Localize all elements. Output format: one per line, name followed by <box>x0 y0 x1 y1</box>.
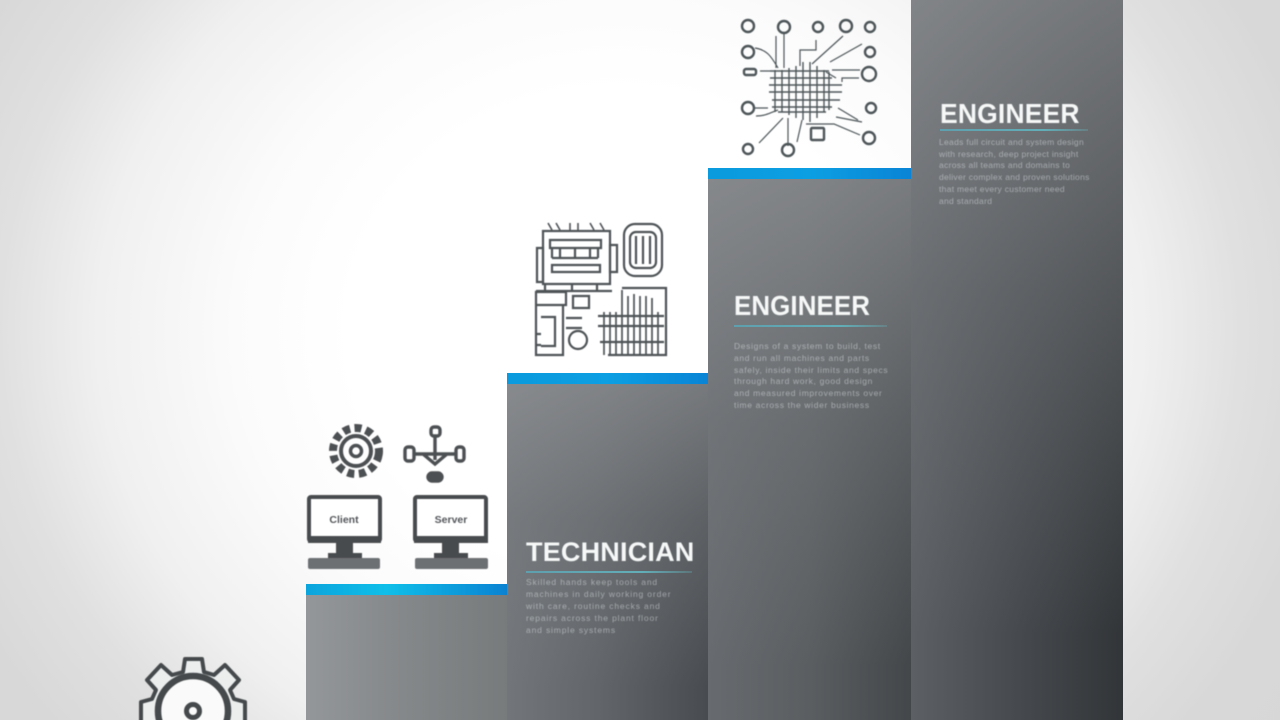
rack array <box>598 288 666 355</box>
icon: valve connector <box>402 424 466 484</box>
body text: and standard <box>939 196 992 206</box>
icon: circuit chip <box>740 18 878 158</box>
body text: Skilled hands keep tools and <box>526 577 658 587</box>
body text <box>938 137 1090 206</box>
body text: repairs across the plant floor <box>526 613 659 623</box>
heading rule <box>526 571 692 572</box>
screen label: Server <box>435 514 467 526</box>
body text: time across the wider business <box>734 400 870 410</box>
body text: with research, deep project insight <box>939 149 1078 159</box>
body text: Designs of a system to build, test <box>734 341 881 351</box>
body text: with care, routine checks and <box>526 601 661 611</box>
heading: technician: TECHNICIAN <box>526 537 694 567</box>
heading rule <box>940 129 1088 131</box>
icon: gear with shield <box>328 423 384 479</box>
heading: engineer: ENGINEER <box>734 290 870 321</box>
traces <box>755 33 862 146</box>
heading rule <box>734 325 887 327</box>
body text: safely, inside their limits and specs <box>734 365 888 375</box>
body text: and measured improvements over <box>734 388 882 398</box>
chip grid <box>769 62 842 122</box>
motor unit <box>624 224 662 276</box>
panel: technician text <box>526 537 694 635</box>
body text: and simple systems <box>526 625 616 635</box>
step bar 1 <box>306 594 507 720</box>
icon: large gear <box>138 656 248 720</box>
terminal circles <box>742 20 876 156</box>
blue cap: step 2 <box>507 373 708 384</box>
icon: computer left <box>306 494 383 570</box>
body text: machines in daily working order <box>526 589 671 599</box>
body text: deliver complex and proven solutions <box>939 172 1090 182</box>
press machine <box>536 223 617 292</box>
body text <box>734 341 888 410</box>
heading: engineer: ENGINEER <box>940 98 1080 129</box>
step bar 4 <box>911 0 1123 720</box>
step bar 2 <box>507 383 708 720</box>
icon: machinery schematic <box>534 222 668 357</box>
panel: engineer text middle <box>734 290 888 410</box>
small parts <box>566 296 589 349</box>
body text: across all teams and domains to <box>939 160 1070 170</box>
body text: through hard work, good design <box>734 376 873 386</box>
step bar 3 <box>708 179 911 720</box>
body text: that meet every customer need <box>939 184 1065 194</box>
panel: engineer text top <box>938 98 1090 206</box>
body text <box>526 577 671 635</box>
control cabinet <box>536 292 566 355</box>
body text: and run all machines and parts <box>734 353 870 363</box>
blue cap: step 1 <box>306 584 507 595</box>
body text: Leads full circuit and system design <box>939 137 1084 147</box>
screen label: Client <box>329 514 359 526</box>
icon: computer right <box>412 494 489 570</box>
blue cap: step 3 <box>708 168 911 179</box>
